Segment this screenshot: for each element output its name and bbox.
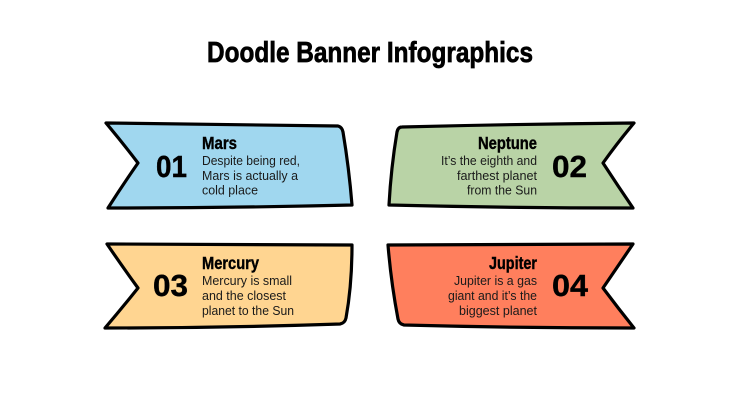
text: Mercury description: Mercury is small (202, 273, 292, 288)
number 03: 03 (153, 268, 188, 303)
heading: Neptune: Neptune (478, 133, 537, 153)
number 02: 02 (552, 149, 587, 184)
text: Neptune description: from the Sun (467, 182, 537, 198)
text: Neptune description: It’s the eighth and (441, 153, 537, 168)
text: Jupiter description: biggest planet (459, 303, 537, 318)
text: Jupiter description: giant and it’s the (448, 288, 537, 303)
banner shape: blue (106, 123, 352, 208)
heading: Jupiter: Jupiter (489, 253, 537, 273)
text: Mars description: cold place (202, 182, 258, 198)
text: Mercury description: and the closest (202, 288, 286, 303)
text: Mercury description (202, 273, 294, 318)
text: Mars description: Despite being red, (202, 153, 300, 168)
panel: Mercury (105, 244, 352, 328)
text: Mars description (202, 153, 300, 198)
title: Doodle Banner Infographics (207, 37, 533, 69)
text: Jupiter description: Jupiter is a gas (454, 273, 537, 288)
panel: Neptune (389, 123, 634, 208)
heading: Mars: Mars (202, 133, 237, 153)
number 04: 04 (552, 268, 589, 303)
banner shape: yellow (105, 244, 352, 328)
banner shape: coral (388, 244, 634, 328)
panel: Jupiter (388, 244, 634, 328)
panel: Mars (106, 123, 352, 208)
number 01: 01 (156, 149, 187, 184)
text: Mars description: Mars is actually a (202, 168, 299, 183)
text: Mercury description: planet to the Sun (202, 303, 294, 318)
banner shape: green (389, 123, 634, 208)
text: Neptune description: farthest planet (457, 168, 537, 183)
heading: Mercury: Mercury (202, 253, 259, 273)
text: Neptune description (441, 153, 537, 198)
text: Jupiter description (448, 273, 537, 318)
